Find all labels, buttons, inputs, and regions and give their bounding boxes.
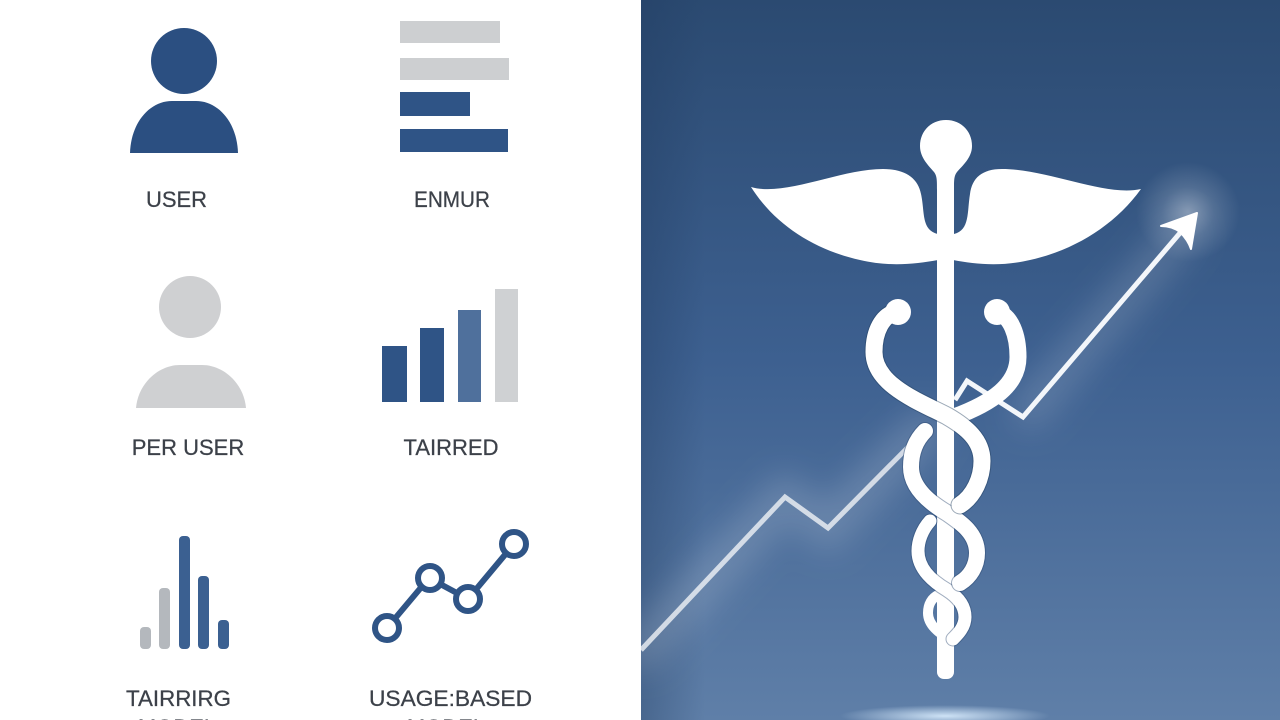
serpent: third loop [918, 521, 965, 639]
icon: ascending bar chart [382, 289, 518, 402]
glow: behind the growth line [641, 235, 1180, 650]
icon: rounded bars [140, 536, 229, 649]
serpent: right body behind staff [954, 312, 1018, 417]
label: enmur: ENMUR [414, 187, 490, 212]
growth arrow [641, 213, 1197, 650]
serpent: left body and first loop [874, 312, 982, 505]
icon: line chart with nodes [375, 532, 526, 640]
staff [937, 150, 954, 679]
right wing [953, 169, 1141, 264]
label: per user: PER USER [132, 435, 244, 460]
icon: horizontal bars [400, 21, 509, 152]
serpent: tail lobe [928, 595, 953, 640]
label: tairrirg: TAIRRIRG [126, 686, 231, 711]
label: user: USER [146, 187, 207, 212]
panel: pricing model icons [0, 0, 641, 720]
left wing [751, 169, 938, 264]
panel: caduceus with growth arrow [641, 0, 1280, 720]
icon: grey user [136, 276, 246, 408]
glow: floor light [840, 705, 1050, 720]
label: usage-based: USAGE:BASED [369, 686, 532, 711]
serpent heads [885, 299, 1010, 325]
icon: user [130, 28, 238, 153]
label: tairred: TAIRRED [404, 435, 498, 460]
serpent: second loop [911, 431, 977, 583]
glow: arrow tip [1136, 162, 1240, 262]
icon: caduceus [751, 120, 1141, 679]
serpent: coils [874, 312, 1018, 640]
orb [920, 120, 972, 190]
